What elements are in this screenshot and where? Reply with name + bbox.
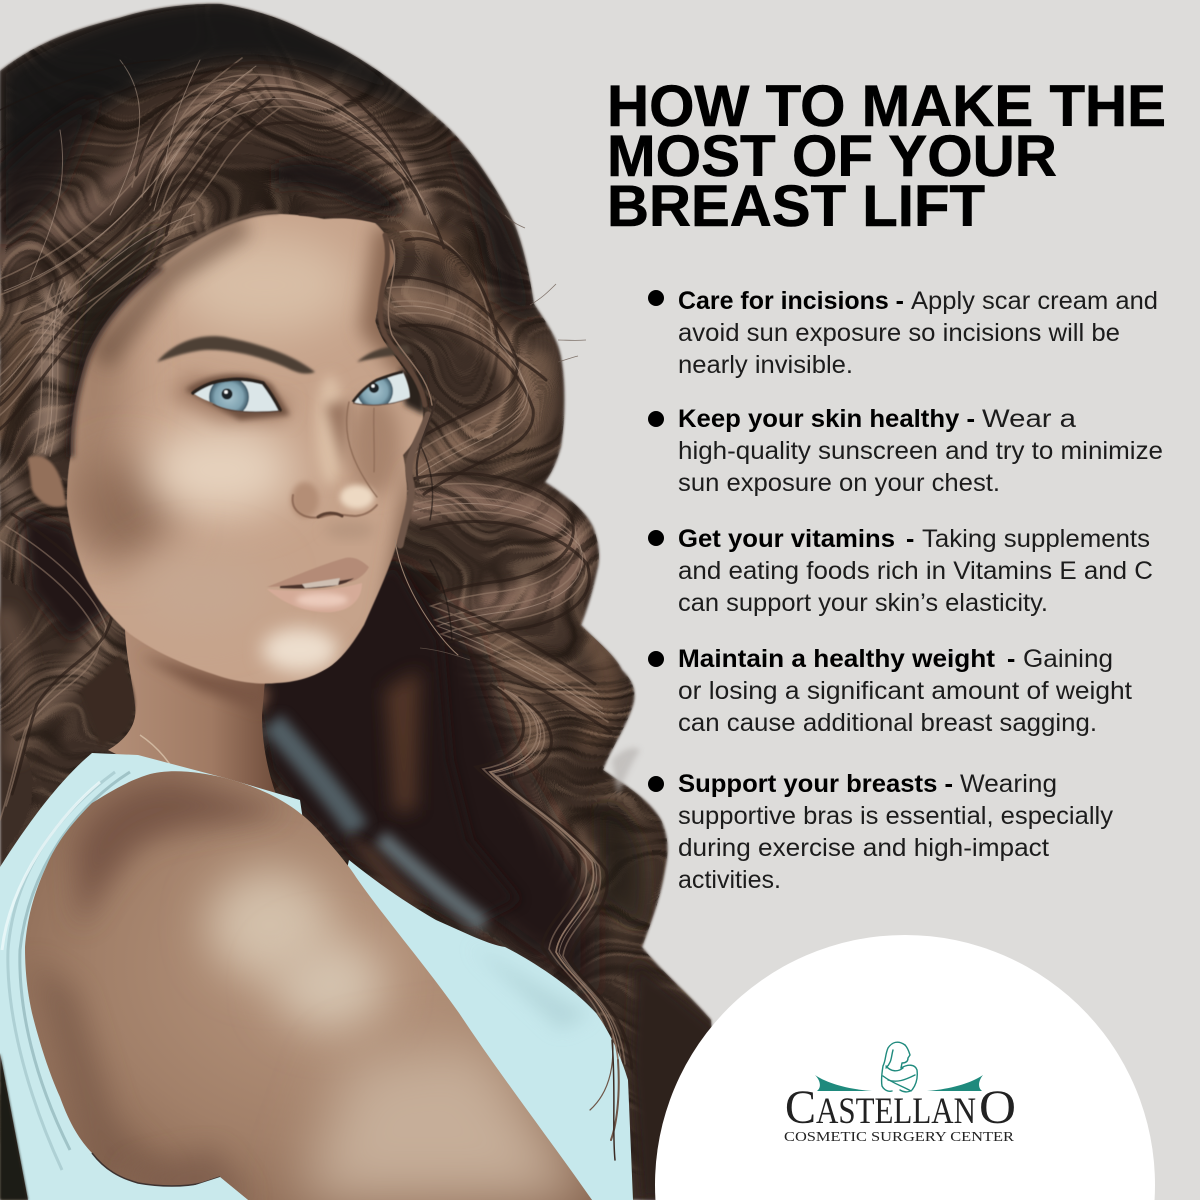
wordmark <box>785 1081 1016 1134</box>
tip: care for incisions <box>648 287 1158 379</box>
wordmark: C <box>785 1081 816 1134</box>
hair: displaced streak texture <box>0 0 720 1200</box>
tip: keep your skin healthy <box>648 405 1163 497</box>
tip: maintain a healthy weight: Gaining <box>1023 645 1113 673</box>
arm and shoulder <box>25 771 592 1200</box>
tip: support your breasts: during exercise and high-impact <box>678 834 1049 862</box>
tip: care for incisions: Apply scar cream and <box>911 287 1158 315</box>
face <box>60 212 425 684</box>
tip: support your breasts <box>648 770 1114 894</box>
left wing <box>815 1075 872 1091</box>
ghost hair edge <box>612 748 640 795</box>
tip: get your vitamins: - <box>906 525 914 553</box>
tip: maintain a healthy weight: can cause additional breast sagging. <box>678 709 1097 737</box>
flyaway strands <box>420 215 586 660</box>
tip: keep your skin healthy: high-quality sunscreen and try to minimize <box>678 437 1163 465</box>
nose <box>293 402 377 518</box>
tip: support your breasts: supportive bras is essential, especially <box>678 802 1114 830</box>
wordmark: ASTELLAN <box>816 1091 976 1132</box>
tip: maintain a healthy weight: - <box>1007 645 1015 673</box>
hair: broad waves <box>0 0 720 1200</box>
hair: dark areas <box>0 0 720 1200</box>
tip: maintain a healthy weight <box>648 645 1132 737</box>
skin shading <box>175 235 355 335</box>
lips <box>267 558 369 612</box>
tip: keep your skin healthy: Keep your skin healthy - <box>678 405 975 433</box>
tip: support your breasts: Support your breasts - <box>678 770 953 798</box>
icon: woman with crossed arms <box>882 1042 917 1092</box>
tank top: strap and lower panel <box>0 753 330 1200</box>
tip: support your breasts: Wearing <box>960 770 1057 798</box>
photo: woman with curly hair <box>0 0 720 1200</box>
tip: care for incisions: avoid sun exposure so incisions will be <box>678 319 1120 347</box>
tip: maintain a healthy weight: Maintain a healthy weight <box>678 645 996 673</box>
hair base silhouette <box>0 4 720 1200</box>
tip: care for incisions: Care for incisions - <box>678 287 904 315</box>
title <box>607 74 1166 239</box>
right eye <box>353 368 425 415</box>
dark hair and blurred strap behind neck <box>255 560 520 925</box>
tank top: right panel <box>340 860 633 1200</box>
ear <box>28 456 66 507</box>
title: BREAST LIFT <box>607 174 985 239</box>
title: HOW TO MAKE THE <box>607 74 1166 139</box>
tip: maintain a healthy weight: or losing a significant amount of weight <box>678 677 1132 705</box>
logo: Castellano Cosmetic Surgery Center <box>784 1042 1016 1145</box>
tip: get your vitamins: Get your vitamins <box>678 525 895 553</box>
front hair strands <box>71 212 458 655</box>
tip: support your breasts: activities. <box>678 866 781 894</box>
tip: get your vitamins: and eating foods rich in Vitamins E and C <box>678 557 1153 585</box>
tip: keep your skin healthy: sun exposure on your chest. <box>678 469 1000 497</box>
right wing <box>927 1075 983 1091</box>
tip: get your vitamins: can support your skin’s elasticity. <box>678 589 1048 617</box>
hair: fine strands <box>0 58 632 1068</box>
wordmark: O <box>979 1081 1016 1134</box>
neck <box>80 625 280 805</box>
tagline: COSMETIC SURGERY CENTER <box>784 1130 1015 1145</box>
right eyebrow <box>357 345 412 362</box>
tip: keep your skin healthy: Wear a <box>982 405 1076 433</box>
title: MOST OF YOUR <box>607 124 1057 189</box>
left eyebrow <box>157 336 315 374</box>
tip: get your vitamins <box>648 525 1153 617</box>
left eye <box>185 374 290 420</box>
hair lock over tank top <box>490 690 619 1160</box>
tip: care for incisions: nearly invisible. <box>678 351 853 379</box>
tip: get your vitamins: Taking supplements <box>922 525 1150 553</box>
white logo circle <box>655 935 1155 1200</box>
